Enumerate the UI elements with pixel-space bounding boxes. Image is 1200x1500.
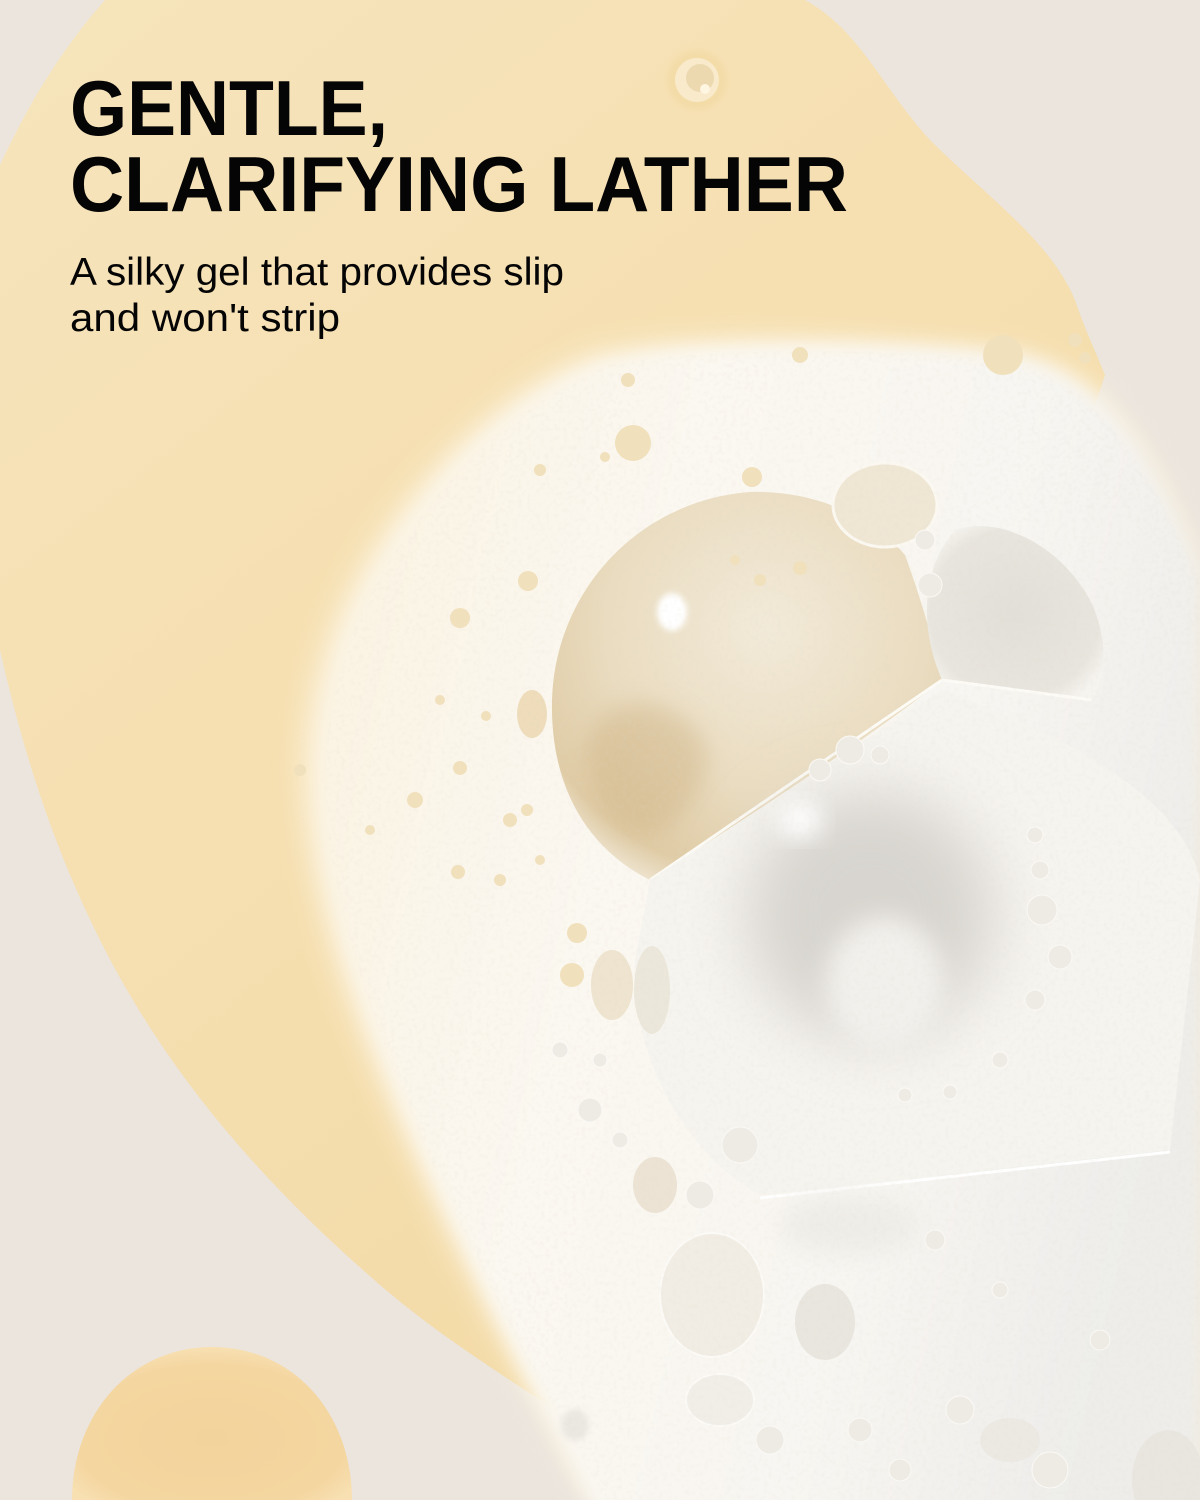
- central blurred bubble: [635, 690, 1200, 1198]
- small top bubble: [833, 463, 937, 547]
- foam specks: [294, 333, 1091, 987]
- subtitle: A silky gel that provides slip: [70, 251, 564, 294]
- foam glow: [297, 334, 1200, 1500]
- round gel drop: [72, 1347, 352, 1500]
- foam grain: [280, 320, 1200, 1500]
- title: CLARIFYING LATHER: [70, 140, 848, 228]
- title: GENTLE,: [70, 64, 388, 152]
- subtitle: [70, 251, 564, 340]
- subtitle: and won't strip: [70, 297, 340, 340]
- pale foam bubbles: [552, 530, 1110, 1488]
- upper right bubble: [927, 526, 1103, 700]
- foam body: [315, 344, 1200, 1500]
- large amber bubble: [552, 492, 942, 880]
- title: [70, 64, 848, 228]
- small droplet on gel: [667, 50, 727, 110]
- lower bubbles: [517, 690, 1200, 1500]
